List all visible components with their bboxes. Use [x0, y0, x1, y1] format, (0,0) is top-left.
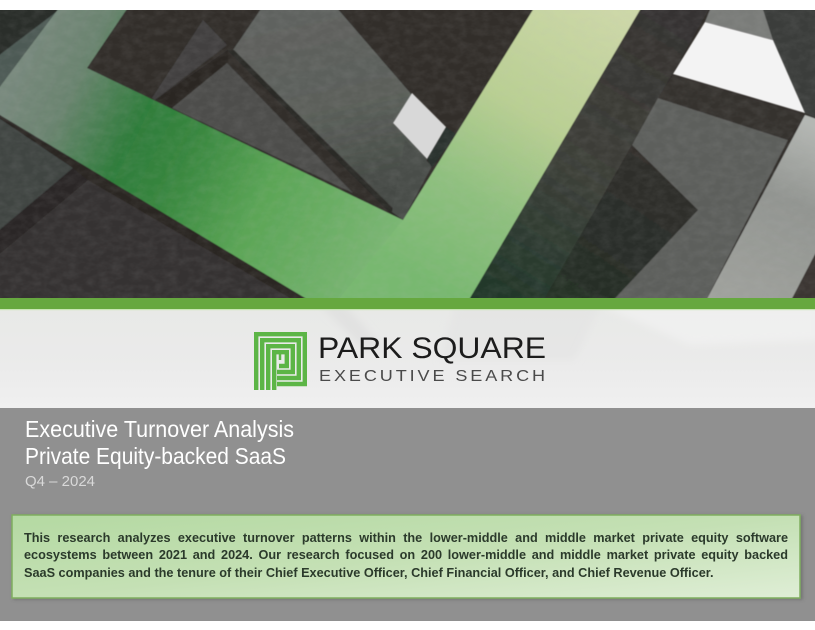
callout text: research summary: SaaS companies and the tenure of their Chief Executive Officer, Chief Financial Officer, and Chief Revenue Officer. — [24, 566, 714, 580]
hero image: abstract concrete and green beams — [0, 0, 815, 310]
wordmark: PARK SQUARE — [318, 332, 546, 365]
callout text: research summary: ecosystems between 2021 and 2024. Our research focused on 200 lower-middle and middle market private equity backed — [24, 548, 788, 562]
title — [25, 416, 294, 469]
logo: Park Square Executive Search — [256, 332, 548, 390]
tagline: EXECUTIVE SEARCH — [319, 368, 548, 385]
logo band — [0, 305, 815, 408]
subtitle: date: Q4 – 2024 — [25, 474, 95, 490]
white skylight — [673, 22, 805, 113]
title: Executive Turnover Analysis — [25, 416, 294, 442]
callout text: research summary: This research analyzes executive turnover patterns within the lower-middle and middle market private equity software — [24, 531, 788, 545]
callout text: research summary — [24, 531, 788, 580]
icon: square P spiral — [256, 334, 305, 390]
callout: research summary box — [12, 515, 800, 598]
gray title panel — [0, 408, 815, 621]
title: Private Equity-backed SaaS — [25, 443, 286, 469]
green divider bar — [0, 298, 815, 309]
white square — [393, 93, 446, 159]
